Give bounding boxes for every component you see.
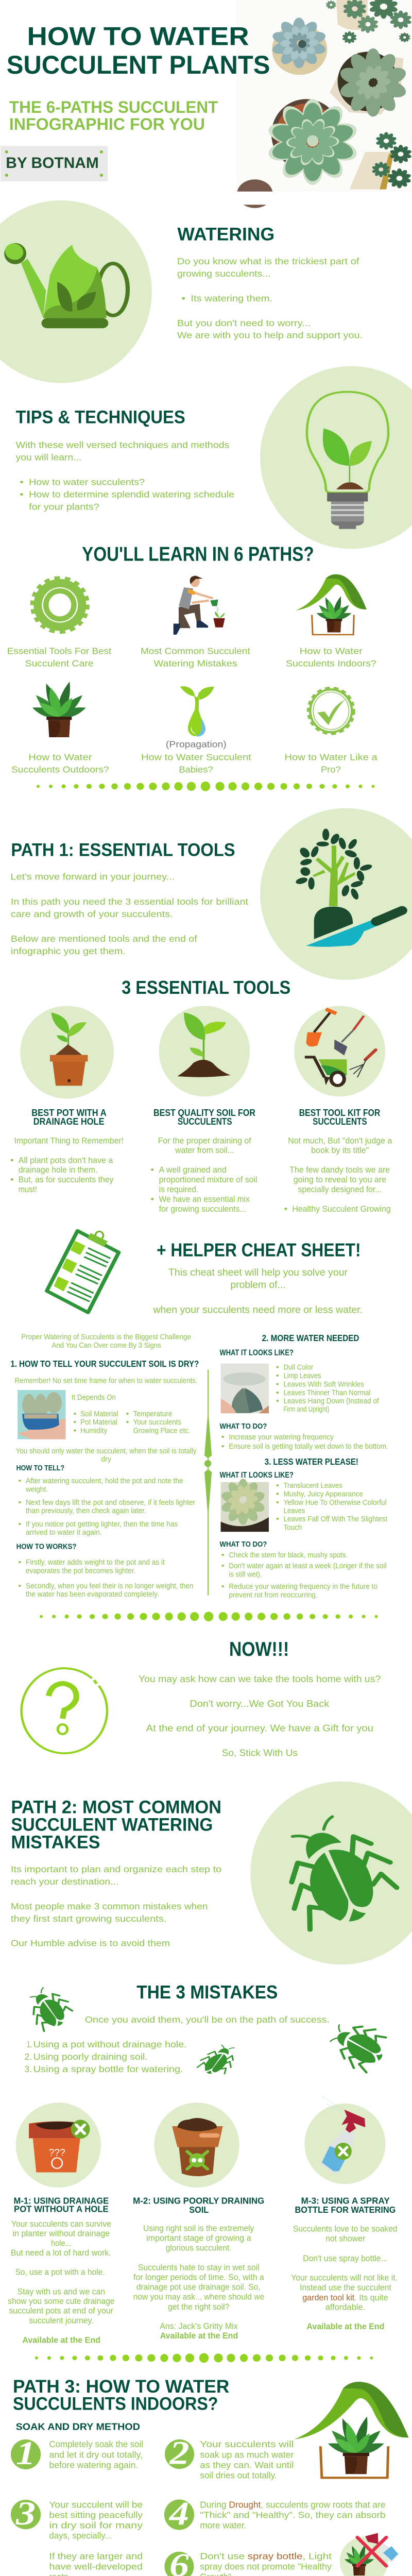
- hero photo: potted succulents from above: [236, 0, 412, 208]
- tool 3 text: [284, 1108, 392, 1213]
- m-2 text: get the right soil?: [168, 2302, 229, 2311]
- cheat sheet left column head: Remember! No set time frame for when to water succulents.: [15, 1377, 198, 1385]
- icon: spray bottle: [304, 2096, 385, 2184]
- soil dry text: dry: [101, 1455, 111, 1464]
- icon: potted plant: [30, 681, 88, 737]
- soil dry text: arrived to water it again.: [26, 1529, 101, 1537]
- soil dry text: Humidity: [80, 1427, 107, 1435]
- now text: [139, 1674, 381, 1758]
- six path labels row one: Succulents Indoors?: [286, 658, 376, 669]
- watering intro: Its watering them.: [191, 294, 272, 304]
- soil dry text: weight.: [25, 1486, 48, 1494]
- number badges: 4: [168, 2496, 189, 2532]
- path 2 intro: they first start growing succulents.: [11, 1913, 166, 1924]
- cheat sheet left column head: And You Can Over come By 3 Signs: [52, 1342, 161, 1350]
- less water text: 3. LESS WATER PLEASE!: [265, 1456, 358, 1467]
- m-1 text: Available at the End: [22, 2335, 100, 2345]
- path 1 intro: Let's move forward in your journey...: [10, 872, 175, 882]
- tool 2 text: proportioned mixture of soil: [159, 1175, 257, 1184]
- less water text: WHAT IT LOOKS LIKE?: [220, 1470, 294, 1480]
- left column steps: best sitting peacefully: [49, 2510, 143, 2520]
- less water text: •: [221, 1583, 225, 1591]
- now text: You may ask how can we take the tools home with us?: [139, 1674, 381, 1685]
- watering intro: But you don't need to worry...: [177, 318, 311, 328]
- path 1 intro: Below are mentioned tools and the end of: [11, 934, 197, 944]
- m-1 text: Your succulents can survive: [11, 2219, 111, 2229]
- less water text: WHAT TO DO?: [220, 1540, 267, 1549]
- cheat sheet left column head: [10, 1333, 199, 1385]
- less water text: Reduce your watering frequency in the future to: [229, 1583, 377, 1591]
- icon: small bug centre: [194, 2041, 246, 2082]
- cheat sheet right column head: [220, 1333, 359, 1380]
- m-3 text: Available at the End: [306, 2322, 384, 2331]
- section: path one: [10, 681, 412, 1099]
- soil dry text: •: [126, 1418, 129, 1427]
- cheat sheet left column head: 1. HOW TO TELL YOUR SUCCULENT SOIL IS DRY?: [10, 1359, 199, 1369]
- more water text: Leaves Thinner Than Normal: [284, 1389, 370, 1397]
- soil dry text: [16, 1394, 197, 1599]
- tool 1 text: Important Thing to Remember!: [14, 1136, 124, 1145]
- less water text: is still wet).: [229, 1570, 262, 1579]
- tool 1 text: drainage hole in them.: [19, 1165, 97, 1175]
- more water text: Leaves Hang Down (Instead of: [284, 1397, 379, 1405]
- icon: soil with sprout: [177, 1012, 231, 1077]
- heading: six paths: YOU'LL LEARN IN 6 PATHS?: [82, 543, 314, 565]
- soil dry text: It Depends On: [72, 1394, 116, 1402]
- m-3 text: not shower: [325, 2234, 365, 2243]
- byline badge: [1, 146, 108, 181]
- number badges: 1: [16, 2435, 36, 2472]
- path 2 intro: Its important to plan and organize each step to: [11, 1865, 221, 1875]
- icon: light bulb with sprout: [260, 366, 412, 549]
- mistakes list: Using a spray bottle for watering.: [33, 2064, 183, 2075]
- right column steps: "Thick" and "Healthy". So, they can absorb: [200, 2510, 385, 2520]
- six path labels row two: [11, 739, 377, 775]
- tool 3 text: The few dandy tools we are: [289, 1165, 390, 1175]
- watering intro: [177, 225, 363, 341]
- mistakes list: Once you avoid them, you'll be on the path of success.: [85, 2015, 330, 2025]
- watering intro: Do you know what is the trickiest part of: [177, 256, 359, 266]
- photo: cactus in blue pot: [18, 1390, 66, 1439]
- m-2 text: SOIL: [189, 2205, 209, 2214]
- soil dry text: •: [18, 1499, 21, 1507]
- question mark dot: [58, 1724, 67, 1734]
- number badges: 2: [169, 2435, 190, 2471]
- left column steps: Your succulent will be: [49, 2500, 143, 2510]
- m-2 text: for longer periods of time. So, with a: [133, 2273, 264, 2282]
- tool 2 text: SUCCULENTS: [178, 1116, 232, 1127]
- tips and techniques text: TIPS & TECHNIQUES: [16, 408, 185, 428]
- m-3 text: affordable.: [325, 2302, 365, 2312]
- tool 2 text: for growing succulents...: [159, 1204, 247, 1213]
- left column steps: If they are larger and: [49, 2551, 143, 2562]
- title: HOW TO WATER: [27, 22, 249, 50]
- icon: large bug in circle: [250, 1782, 412, 1964]
- mistakes list: [24, 2015, 330, 2075]
- path 2 intro: PATH 2: MOST COMMON: [11, 1798, 221, 1818]
- right column steps: Your succulents will: [200, 2439, 294, 2450]
- icon: check seal: [309, 688, 353, 733]
- tool 1 text: All plant pots don't have a: [19, 1156, 113, 1165]
- now text: Don't worry...We Got You Back: [190, 1698, 330, 1709]
- helper cheat sheet text: This cheat sheet will help you solve your: [168, 1266, 348, 1278]
- soil dry text: •: [73, 1427, 76, 1435]
- divider: vertical spindle: [204, 1370, 212, 1596]
- six path labels row one: [7, 646, 376, 669]
- helper cheat sheet text: when your succulents need more or less water.: [153, 1303, 363, 1315]
- path 2 intro: Most people make 3 common mistakes when: [11, 1902, 208, 1911]
- m-1 text: show you some cute drainage: [8, 2297, 114, 2306]
- less water text: [220, 1456, 388, 1599]
- mistakes list: Using poorly draining soil.: [33, 2052, 148, 2062]
- section: hero and watering intro: [0, 0, 412, 383]
- soil dry text: Secondly, when you feel their is no longer weight, then: [26, 1582, 194, 1590]
- m-2 text: M-2: USING POORLY DRAINING: [133, 2196, 264, 2206]
- more water text: •: [276, 1397, 279, 1405]
- m-2 text: Succulents hate to stay in wet soil: [138, 2263, 260, 2272]
- heading: path 3: SUCCULENTS INDOORS?: [13, 2394, 218, 2414]
- icon: pot with poison soil: [154, 2103, 239, 2188]
- tips and techniques text: How to determine splendid watering schedule: [29, 489, 234, 500]
- cheat sheet left column head: Proper Watering of Succulents is the Biggest Challenge: [21, 1333, 191, 1341]
- m-1 text: Stay with us and we can: [18, 2287, 105, 2296]
- icon: plant with crossed spray bottle: [340, 2533, 400, 2576]
- now text: So, Stick With Us: [222, 1748, 298, 1758]
- tool 3 text: Not much, But "don't judge a: [288, 1136, 392, 1145]
- tool 2 text: We have an essential mix: [159, 1195, 250, 1204]
- cheat sheet right column head: Dull Color: [284, 1364, 314, 1371]
- right column steps: [197, 2439, 385, 2576]
- less water text: Touch: [284, 1523, 302, 1532]
- dotted divider: [35, 2353, 373, 2363]
- path 1 intro: care and growth of your succulents.: [11, 909, 173, 920]
- tool 3 text: Healthy Succulent Growing: [292, 1204, 391, 1213]
- m-3 text: M-3: USING A SPRAY: [301, 2196, 390, 2206]
- soil dry text: Temperature: [133, 1410, 172, 1418]
- section: tools and cheat sheet: [10, 1009, 392, 1413]
- soil dry text: Growing Place etc.: [133, 1427, 190, 1435]
- helper cheat sheet text: problem of...: [230, 1279, 286, 1291]
- subtitle: THE 6-PATHS SUCCULENT: [9, 98, 218, 116]
- section: path two: [11, 1724, 412, 2082]
- section: soak and dry method: [11, 2421, 400, 2576]
- m-1 text: M-1: USING DRAINAGE: [14, 2196, 109, 2206]
- title: SUCCULENT PLANTS: [7, 50, 270, 79]
- tool 1 text: •: [10, 1175, 14, 1184]
- tips and techniques text: •: [20, 489, 24, 500]
- six path labels row two: How to Water: [28, 752, 92, 762]
- photo: overwatered succulent: [220, 1479, 269, 1532]
- soil dry text: You should only water the succulent, when the soil is totally: [16, 1447, 197, 1455]
- icon: sprout from water drop: [180, 686, 214, 737]
- right column steps: more water.: [200, 2520, 247, 2531]
- soil dry text: •: [126, 1410, 129, 1418]
- tips and techniques text: you will learn...: [16, 452, 81, 463]
- m-3 text: [291, 2196, 398, 2331]
- six path labels row two: Succulents Outdoors?: [11, 765, 109, 775]
- tool 2 text: For the proper draining of: [158, 1136, 251, 1145]
- photo: wrinkled succulent: [221, 1364, 269, 1413]
- number badges: [11, 2435, 194, 2576]
- soil dry text: •: [18, 1477, 21, 1485]
- heading: now: NOW!!!: [229, 1638, 289, 1660]
- more water text: •: [221, 1443, 225, 1451]
- icon: succulent house: [296, 574, 367, 635]
- subtitle: INFOGRAPHIC FOR YOU: [9, 115, 205, 133]
- icon: large succulent house: [294, 2382, 408, 2478]
- less water text: •: [276, 1482, 279, 1490]
- left column steps: have well-developed: [49, 2562, 143, 2572]
- soil dry text: After watering succulent, hold the pot and note the: [26, 1477, 183, 1485]
- path 2 intro: SUCCULENT WATERING: [11, 1815, 213, 1835]
- soil dry text: Next few days lift the pot and observe, if it feels lighter: [26, 1499, 196, 1507]
- tool 1 text: [10, 1108, 124, 1194]
- cheat sheet right column head: •: [276, 1372, 279, 1380]
- cheat sheet right column head: 2. MORE WATER NEEDED: [262, 1333, 359, 1344]
- path 1 intro: PATH 1: ESSENTIAL TOOLS: [11, 840, 235, 860]
- soil dry text: Firstly, water adds weight to the pot and as it: [26, 1558, 165, 1567]
- number badges: 3: [15, 2496, 36, 2532]
- soil dry text: HOW TO TELL?: [16, 1464, 64, 1472]
- tool 2 text: A well grained and: [159, 1165, 227, 1175]
- tips and techniques text: [16, 408, 234, 512]
- tool 3 text: book by its title": [311, 1146, 369, 1155]
- m-1 text: succulent journey.: [29, 2316, 94, 2325]
- less water text: Translucent Leaves: [284, 1482, 342, 1490]
- mistakes list: 1.: [27, 2039, 32, 2049]
- m-3 text: Instead use the succulent: [300, 2283, 391, 2292]
- tool 2 text: •: [150, 1165, 154, 1175]
- icon: tree and trowel: [260, 808, 412, 980]
- icon: pot without hole: [16, 2103, 101, 2188]
- six path labels row two: How to Water Like a: [285, 752, 377, 762]
- path 1 intro: infographic you get them.: [11, 946, 126, 956]
- icon: small bug right: [324, 2011, 399, 2076]
- right column steps: as they can. Wait until: [200, 2460, 294, 2470]
- mistakes list: 2.: [24, 2052, 32, 2062]
- tool 3 text: •: [284, 1204, 287, 1213]
- m-2 text: Using right soil is the extremely: [143, 2224, 254, 2233]
- tool 1 text: DRAINAGE HOLE: [33, 1116, 105, 1127]
- left column steps: before watering again.: [49, 2460, 138, 2470]
- right column steps: soak up as much water: [200, 2450, 294, 2460]
- icon: garden tool kit: [305, 1009, 376, 1086]
- mistakes list: Using a pot without drainage hole.: [33, 2039, 187, 2049]
- more water text: •: [276, 1389, 279, 1397]
- more water text: Firm and Upright): [284, 1405, 329, 1413]
- m-2 text: Available at the End: [160, 2331, 238, 2341]
- heading: path 3: PATH 3: HOW TO WATER: [13, 2377, 230, 2397]
- more water text: •: [276, 1381, 279, 1388]
- now text: At the end of your journey. We have a Gift for you: [146, 1723, 373, 1734]
- cheat sheet right column head: WHAT IT LOOKS LIKE?: [220, 1348, 294, 1357]
- tool 1 text: must!: [19, 1184, 37, 1194]
- soil dry text: •: [18, 1558, 21, 1567]
- six path labels row two: Babies?: [179, 765, 213, 775]
- soil dry text: •: [18, 1582, 21, 1590]
- soil dry text: •: [73, 1410, 76, 1418]
- tool 2 text: BEST QUALITY SOIL FOR: [153, 1108, 255, 1118]
- icon: small bug left: [28, 1984, 76, 2032]
- section: three mistakes detail: [8, 2096, 408, 2478]
- heading: 3 essential tools: 3 ESSENTIAL TOOLS: [122, 977, 290, 998]
- watering intro: •: [182, 294, 185, 304]
- more water text: Leaves With Soft Wrinkles: [284, 1381, 364, 1388]
- soil dry text: evaporates the pot becomes lighter.: [26, 1567, 135, 1575]
- soil dry text: •: [73, 1418, 76, 1427]
- soil dry text: Your succulents: [133, 1418, 181, 1427]
- m-1 text: in planter without drainage: [12, 2229, 110, 2238]
- tool 2 text: [150, 1108, 257, 1213]
- section: tips and six paths: [7, 366, 412, 669]
- title: [7, 22, 270, 79]
- mistakes list: 3.: [24, 2064, 32, 2075]
- m-2 text: drainage pot use drainage soil. So,: [136, 2282, 261, 2292]
- less water text: Yellow Hue To Otherwise Colorful: [284, 1499, 387, 1507]
- soil dry text: the water has been evaporated completely.: [26, 1590, 159, 1599]
- six path labels row two: How to Water Succulent: [141, 752, 251, 762]
- less water text: Mushy, Juicy Appearance: [284, 1490, 363, 1498]
- right column steps: soil dries out totally.: [200, 2470, 277, 2481]
- six path labels row one: How to Water: [300, 646, 363, 656]
- less water text: •: [276, 1499, 279, 1507]
- heading: soak and dry: SOAK AND DRY METHOD: [16, 2421, 140, 2432]
- less water text: •: [276, 1515, 279, 1523]
- m-1 text: [8, 2196, 114, 2345]
- m-1 text: succulent pots at end of your: [9, 2306, 113, 2315]
- tips and techniques text: How to water succulents?: [29, 477, 145, 487]
- six path labels row one: Most Common Succulent: [141, 646, 250, 656]
- icon: watering can in circle: [0, 200, 152, 383]
- tips and techniques text: for your plants?: [29, 502, 99, 512]
- tool 2 text: water from soil...: [175, 1146, 234, 1155]
- byline badge: BY BOTNAM: [6, 155, 99, 171]
- tool 3 text: BEST TOOL KIT FOR: [299, 1108, 380, 1118]
- dotted divider: [37, 782, 375, 791]
- heading: path 3: [13, 2377, 230, 2414]
- cheat sheet right column head: Limp Leaves: [284, 1372, 321, 1380]
- m-1 text: hole...: [51, 2239, 72, 2248]
- watering intro: WATERING: [177, 225, 274, 245]
- six path labels row one: Watering Mistakes: [153, 658, 237, 669]
- six path labels row one: Succulent Care: [25, 658, 94, 669]
- more water text: [220, 1381, 388, 1451]
- six path labels row two: Pro?: [321, 765, 341, 775]
- m-2 text: glorious succulent.: [166, 2243, 231, 2252]
- path 2 intro: MISTAKES: [11, 1833, 100, 1853]
- path 2 intro: Our Humble advise is to avoid them: [11, 1938, 170, 1948]
- left column steps: Completely soak the soil: [49, 2439, 143, 2450]
- tool 1 text: BEST POT WITH A: [31, 1108, 107, 1118]
- right column steps: spray does not promote "Healthy: [200, 2562, 332, 2572]
- m-2 text: [133, 2196, 264, 2341]
- soil dry text: Pot Material: [80, 1418, 117, 1427]
- watering intro: growing succulents...: [177, 269, 271, 279]
- subtitle: [9, 98, 218, 133]
- m-1 text: But need a lot of hard work.: [11, 2248, 111, 2258]
- left column steps: and let it dry out totally,: [49, 2450, 143, 2460]
- m-3 text: garden tool kit. Its quite: [302, 2293, 388, 2302]
- soil dry text: •: [18, 1520, 21, 1529]
- m-2 text: now you may ask... where should we: [133, 2292, 264, 2301]
- m-3 text: Don't use spray bottle...: [303, 2253, 388, 2263]
- tool 1 text: •: [10, 1156, 14, 1165]
- more water text: WHAT TO DO?: [220, 1422, 267, 1431]
- six path labels row one: Essential Tools For Best: [7, 646, 112, 656]
- icon: pot without hole: ???: [49, 2146, 65, 2158]
- icon: question mark in circle: [22, 1668, 107, 1753]
- tool circles: [20, 1006, 385, 1099]
- more water text: Increase your watering frequency: [229, 1433, 334, 1442]
- left column steps: days, specially...: [49, 2531, 112, 2541]
- helper cheat sheet text: [153, 1240, 363, 1315]
- tool 3 text: going to reveal to you are: [294, 1175, 386, 1184]
- watering intro: We are with you to help and support you.: [177, 330, 363, 341]
- tool 1 text: But, as for succulents they: [19, 1175, 113, 1184]
- hero mask: [0, 192, 412, 205]
- tips and techniques text: With these well versed techniques and methods: [16, 440, 230, 450]
- m-2 text: Ans: Jack's Gritty Mix: [160, 2321, 238, 2331]
- less water text: prevent rot from reoccurring.: [229, 1591, 318, 1599]
- right column steps: During Drought, succulents grow roots that are: [200, 2500, 385, 2510]
- heading: the 3 mistakes: THE 3 MISTAKES: [136, 1982, 278, 2003]
- cheat sheet right column head: •: [276, 1364, 279, 1371]
- less water text: •: [221, 1551, 225, 1560]
- soil dry text: Soil Material: [80, 1410, 118, 1418]
- tool 2 text: •: [150, 1195, 154, 1204]
- soil dry text: If you notice pot getting lighter, then the time has: [26, 1520, 178, 1529]
- soil dry text: than previously, then check again later.: [26, 1507, 146, 1515]
- icon: clipboard checklist: [47, 1231, 119, 1313]
- path 2 intro: [11, 1798, 221, 1948]
- right column steps: Don't use spray bottle, Light: [200, 2551, 332, 2562]
- six path labels row two: (Propagation): [166, 739, 227, 750]
- tool 3 text: SUCCULENTS: [313, 1116, 367, 1127]
- icon: person watering a plant: [174, 575, 225, 635]
- icon: gear: [33, 579, 86, 631]
- m-1 text: So, use a pot with a hole.: [15, 2267, 105, 2277]
- less water text: •: [221, 1562, 225, 1570]
- dotted divider: [40, 1612, 378, 1621]
- icon: pot with drainage hole: [50, 1012, 88, 1086]
- left column steps: [30, 2439, 145, 2576]
- less water text: •: [276, 1490, 279, 1498]
- less water text: Leaves: [284, 1507, 305, 1515]
- path 2 intro: reach your destination...: [11, 1877, 119, 1887]
- tips and techniques text: •: [20, 477, 24, 487]
- tool 3 text: specially designed for...: [298, 1184, 382, 1194]
- section: cheat sheet details: [16, 1370, 388, 1758]
- m-1 text: POT WITHOUT A HOLE: [14, 2204, 109, 2214]
- path 1 intro: In this path you need the 3 essential tools for brilliant: [11, 896, 249, 907]
- less water text: Check the stem for black, mushy spots.: [229, 1551, 348, 1560]
- more water text: •: [221, 1433, 225, 1442]
- m-2 text: important stage of growing a: [146, 2233, 251, 2243]
- tool 2 text: is required.: [159, 1184, 198, 1194]
- left column steps: in dry soil for many: [49, 2520, 143, 2531]
- path 1 intro: [10, 840, 249, 956]
- soil dry text: HOW TO WORKS?: [16, 1543, 76, 1551]
